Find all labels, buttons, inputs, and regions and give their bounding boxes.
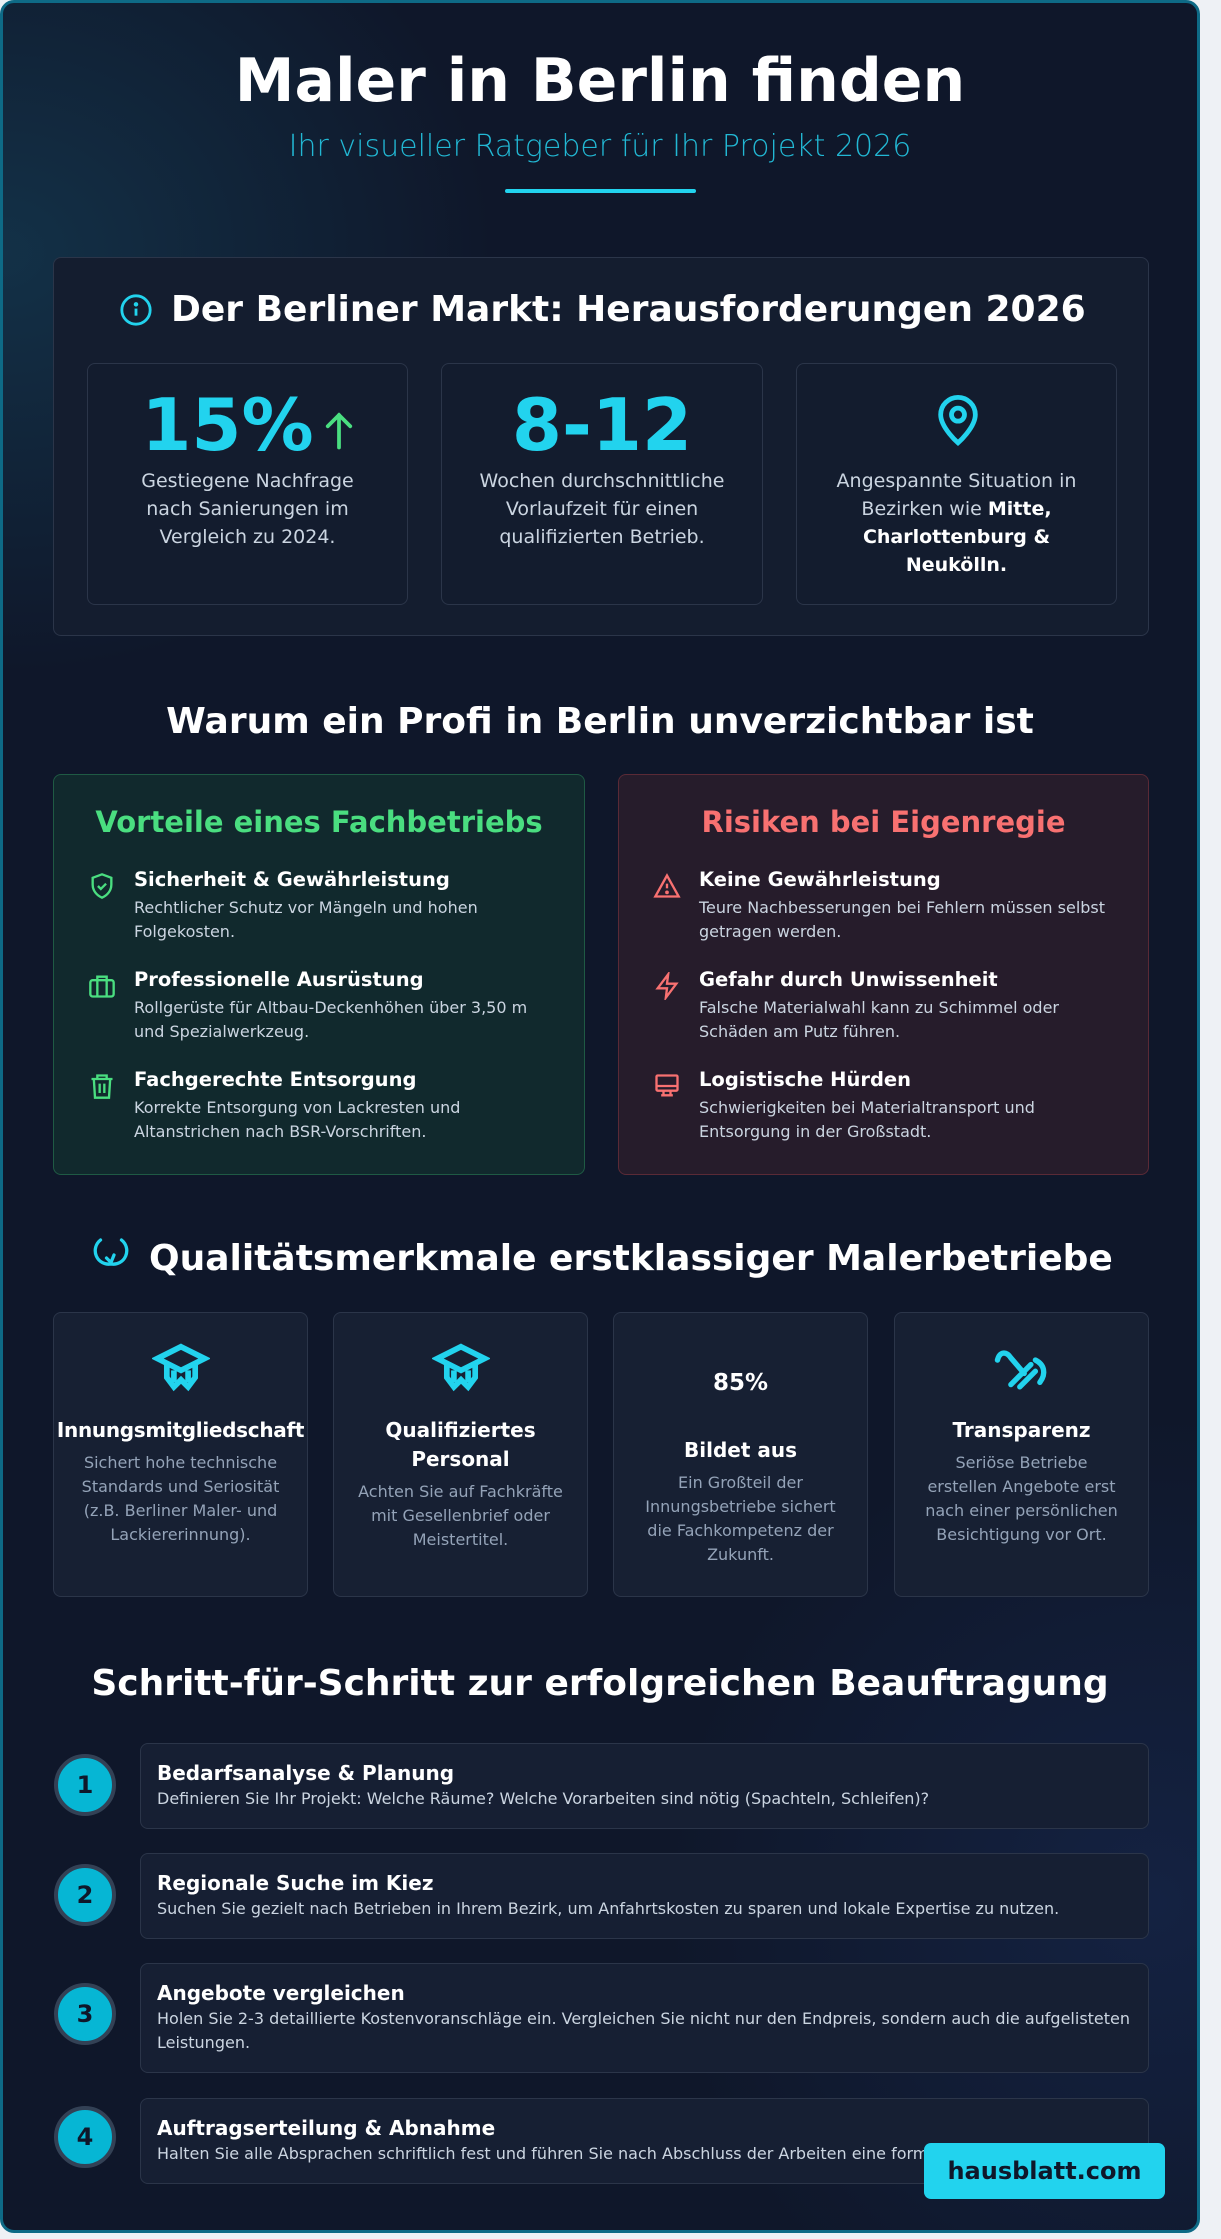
heading: steps: Schritt-für-Schritt zur erfolgreichen Beauftragung bbox=[91, 1663, 1109, 1704]
item: disposal: Fachgerechte Entsorgung bbox=[134, 1068, 416, 1091]
stat card: 15%: Vergleich zu 2024. bbox=[160, 526, 335, 548]
item: no warranty: getragen werden. bbox=[699, 922, 841, 941]
quality card: guild bbox=[53, 1312, 308, 1597]
icon: map pin bbox=[938, 395, 978, 446]
quality card: transparency: erstellen Angebote erst bbox=[927, 1477, 1116, 1496]
quality card: staff bbox=[333, 1312, 588, 1597]
step 3: Holen Sie 2-3 detaillierte Kostenvoranschläge ein. Vergleichen Sie nicht nur den Endpreis, sondern auch die aufgelisteten Leistungen. bbox=[157, 2009, 1130, 2052]
quality card: guild: (z.B. Berliner Maler- und bbox=[84, 1501, 277, 1520]
icon: info bbox=[120, 294, 152, 326]
stat card: districts: Bezirken wie Mitte, bbox=[861, 498, 1052, 520]
quality card: training: Innungsbetriebe sichert bbox=[645, 1497, 836, 1516]
item: logistics: Schwierigkeiten bei Materialtransport und bbox=[699, 1098, 1035, 1117]
panel: advantages: Vorteile eines Fachbetriebs bbox=[95, 805, 543, 839]
quality card: transparency: nach einer persönlichen bbox=[925, 1501, 1118, 1520]
stat card: 15%: 15% bbox=[141, 383, 314, 467]
badge: hausblatt.com bbox=[924, 2143, 1165, 2199]
step 1: Bedarfsanalyse & Planung bbox=[157, 1761, 454, 1785]
heading: quality: Qualitätsmerkmale erstklassiger Malerbetriebe bbox=[149, 1238, 1113, 1279]
stat card: districts bbox=[796, 363, 1117, 605]
quality card: guild: Standards und Seriosität bbox=[82, 1477, 279, 1496]
item: logistics: Logistische Hürden bbox=[699, 1068, 911, 1091]
item: no warranty bbox=[653, 868, 1105, 941]
quality card: training: Zukunft. bbox=[707, 1545, 774, 1564]
step 1 bbox=[54, 1743, 1149, 1829]
stat card: 8-12: 8-12 bbox=[512, 383, 692, 467]
item: ignorance: Falsche Materialwahl kann zu Schimmel oder bbox=[699, 998, 1059, 1017]
title: Maler in Berlin finden bbox=[235, 46, 965, 116]
stat card: districts: Angespannte Situation in bbox=[837, 470, 1076, 492]
quality card: staff: Meistertitel. bbox=[413, 1530, 508, 1549]
item: no warranty: Teure Nachbesserungen bei Fehlern müssen selbst bbox=[699, 898, 1105, 917]
panel: risks bbox=[618, 774, 1149, 1175]
stat card: 8-12: qualifizierten Betrieb. bbox=[499, 526, 705, 548]
subtitle: Ihr visueller Ratgeber für Ihr Projekt 2026 bbox=[289, 129, 911, 164]
item: disposal bbox=[92, 1068, 460, 1141]
item: ignorance: Gefahr durch Unwissenheit bbox=[699, 968, 998, 991]
stat card: 15%: Gestiegene Nachfrage bbox=[141, 470, 354, 492]
quality card: training: 85% bbox=[713, 1370, 768, 1396]
step 3: 3 bbox=[77, 2000, 93, 2028]
item: ignorance bbox=[655, 968, 1059, 1041]
step 4 bbox=[54, 2098, 1149, 2184]
quality card: guild: Sichert hohe technische bbox=[84, 1453, 277, 1472]
stat card: districts: Charlottenburg & bbox=[863, 526, 1050, 548]
item: equipment: Rollgerüste für Altbau-Deckenhöhen über 3,50 m bbox=[134, 998, 527, 1017]
stat card: 15% bbox=[87, 363, 408, 605]
quality card: staff: Qualifiziertes bbox=[385, 1418, 536, 1442]
panel: risks: Risiken bei Eigenregie bbox=[701, 805, 1066, 839]
quality card: staff: mit Gesellenbrief oder bbox=[371, 1506, 550, 1525]
item: safety: Rechtlicher Schutz vor Mängeln und hohen Folgekosten. bbox=[134, 898, 478, 941]
quality card: guild: Lackiererinnung). bbox=[110, 1525, 251, 1544]
step 3: Angebote vergleichen bbox=[157, 1981, 405, 2005]
step 2 bbox=[54, 1853, 1149, 1939]
stat card: 8-12: Wochen durchschnittliche bbox=[480, 470, 724, 492]
quality card: staff: Achten Sie auf Fachkräfte bbox=[358, 1482, 563, 1501]
stat card: 15%: nach Sanierungen im bbox=[146, 498, 349, 520]
quality card: training bbox=[613, 1312, 868, 1597]
title underline bbox=[505, 189, 696, 193]
step 2: Regionale Suche im Kiez bbox=[157, 1871, 433, 1895]
badge: hausblatt.com: hausblatt.com bbox=[947, 2157, 1142, 2185]
step 2: Suchen Sie gezielt nach Betrieben in Ihrem Bezirk, um Anfahrtskosten zu sparen und lokale Expertise zu nutzen. bbox=[157, 1899, 1059, 1918]
step 4: 4 bbox=[77, 2123, 93, 2151]
market heading: Der Berliner Markt: Herausforderungen 2026 bbox=[171, 289, 1086, 330]
quality card: training: Ein Großteil der bbox=[678, 1473, 803, 1492]
stat card: 8-12: Vorlaufzeit für einen bbox=[506, 498, 698, 520]
stat card: districts: Neukölln. bbox=[906, 554, 1007, 576]
heading: why pro: Warum ein Profi in Berlin unverzichtbar ist bbox=[166, 701, 1034, 742]
item: safety bbox=[92, 868, 478, 941]
item: equipment bbox=[89, 968, 527, 1041]
step 4: Auftragserteilung & Abnahme bbox=[157, 2116, 495, 2140]
item: logistics: Entsorgung in der Großstadt. bbox=[699, 1122, 931, 1141]
item: equipment: Professionelle Ausrüstung bbox=[134, 968, 424, 991]
item: logistics bbox=[655, 1068, 1035, 1141]
step 3 bbox=[54, 1963, 1149, 2073]
item: ignorance: Schäden am Putz führen. bbox=[699, 1022, 900, 1041]
item: safety: Sicherheit & Gewährleistung bbox=[134, 868, 450, 891]
stat card: 8-12 bbox=[441, 363, 763, 605]
step 1: Definieren Sie Ihr Projekt: Welche Räume? Welche Vorarbeiten sind nötig (Spachteln, Schleifen)? bbox=[157, 1789, 929, 1808]
quality card: transparency: Transparenz bbox=[952, 1418, 1091, 1442]
item: no warranty: Keine Gewährleistung bbox=[699, 868, 941, 891]
quality card: training: Bildet aus bbox=[684, 1438, 797, 1462]
panel: advantages bbox=[53, 774, 585, 1175]
icon: quality bbox=[94, 1238, 128, 1266]
quality card: transparency bbox=[894, 1312, 1149, 1597]
item: equipment: und Spezialwerkzeug. bbox=[134, 1022, 309, 1041]
quality card: transparency: Besichtigung vor Ort. bbox=[936, 1525, 1107, 1544]
quality card: staff: Personal bbox=[411, 1447, 510, 1471]
panel: market bbox=[53, 257, 1149, 636]
step 1: 1 bbox=[77, 1771, 93, 1799]
step 4: Halten Sie alle Absprachen schriftlich fest und führen Sie nach Abschluss der Arbeiten eine formelle Abnahme durch. bbox=[157, 2144, 1094, 2163]
quality card: training: die Fachkompetenz der bbox=[647, 1521, 834, 1540]
quality card: guild: Innungsmitgliedschaft bbox=[57, 1418, 304, 1442]
item: disposal: Korrekte Entsorgung von Lackresten und Altanstrichen nach BSR-Vorschriften. bbox=[134, 1098, 460, 1141]
quality card: transparency: Seriöse Betriebe bbox=[955, 1453, 1088, 1472]
step 2: 2 bbox=[77, 1881, 93, 1909]
